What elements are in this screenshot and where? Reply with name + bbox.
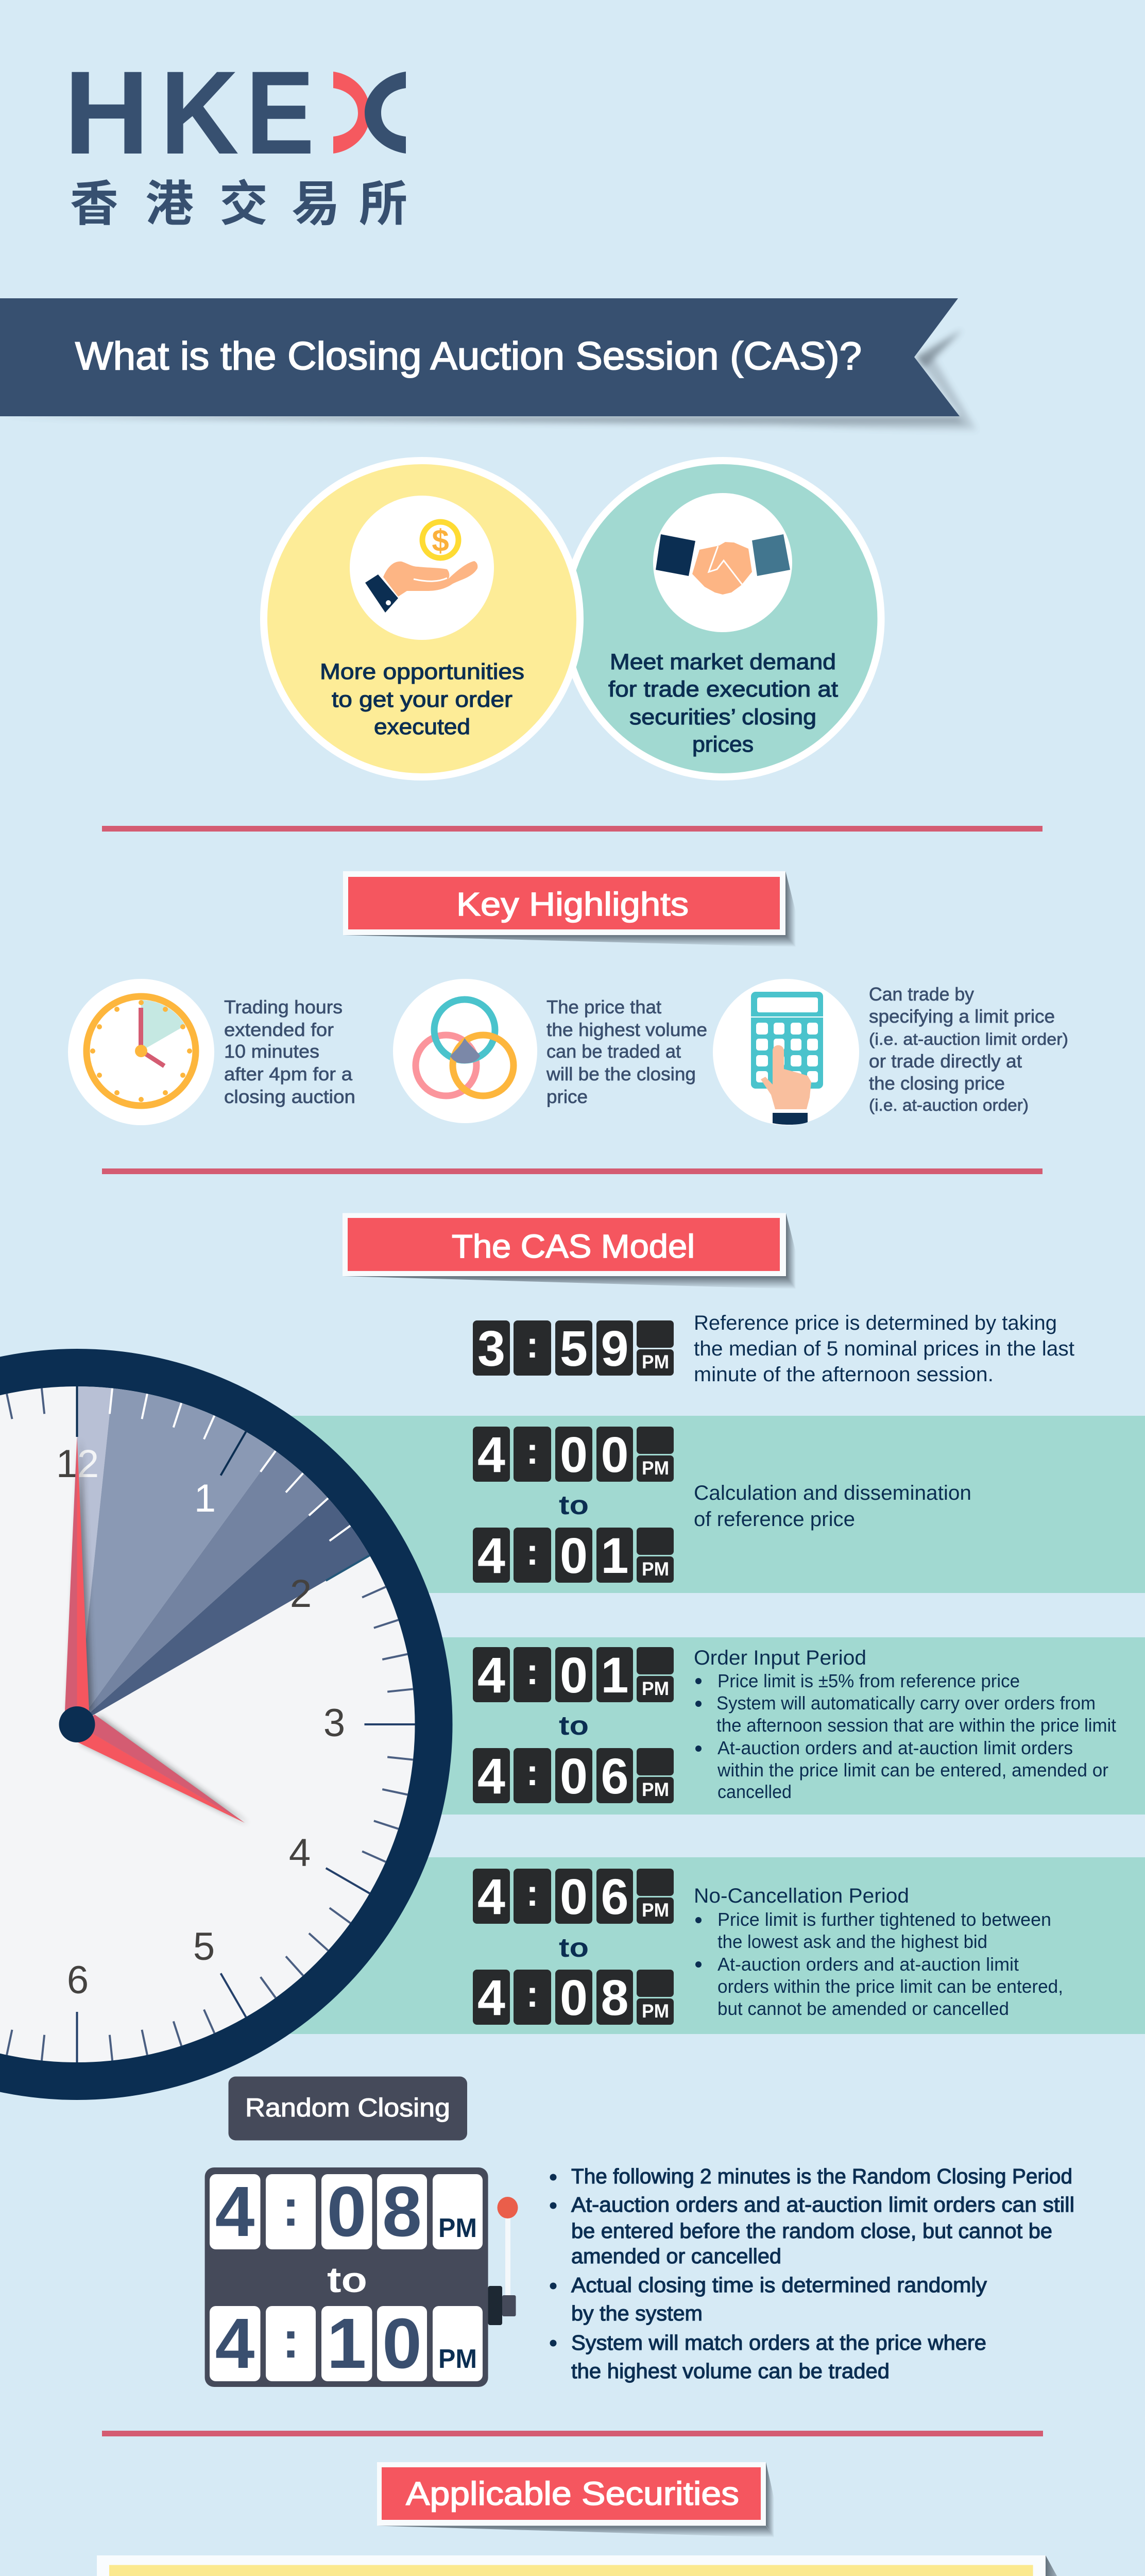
top reel: 4:08 PM: : bbox=[282, 2179, 299, 2237]
flip clock: 4:01 to 4:06 PM: PM bbox=[642, 1678, 669, 1699]
top reel: 4:08 PM: 8 bbox=[382, 2172, 422, 2251]
flip clock: 4:01 to 4:06 PM: 0 bbox=[560, 1748, 588, 1804]
text: random closing list: System will match orders at the price where bbox=[571, 2331, 986, 2354]
clock numerals: 5 bbox=[193, 1925, 215, 1969]
text: reference price: the median of 5 nominal prices in the last bbox=[694, 1337, 1074, 1360]
text: can be traded at bbox=[546, 1041, 681, 1062]
icon: handshake bbox=[656, 534, 790, 595]
flip clock: 4:00 to 4:01 PM: 4 bbox=[477, 1427, 505, 1483]
bottom reel: 4:10 PM: 1 bbox=[327, 2304, 366, 2383]
flip clock: 4:06 to 4:08 PM: PM bbox=[642, 1900, 669, 1921]
text: Trading hours bbox=[224, 996, 343, 1018]
flip clock: 4:00 to 4:01 PM: 0 bbox=[560, 1427, 588, 1483]
chart: clock face bbox=[0, 1349, 452, 2100]
logo Chinese name: 香港交易所 bbox=[70, 165, 407, 235]
clock numerals: 3 bbox=[323, 1701, 345, 1745]
text: no-cancellation period: Price limit is further tightened to between bbox=[717, 1909, 1051, 1930]
logo wordmark letters: E bbox=[246, 46, 314, 179]
flip clock: 4:01 to 4:06 PM: 6 bbox=[601, 1748, 628, 1804]
text: random closing list bbox=[550, 2164, 1074, 2383]
text: calculation and dissemination: Calculation and dissemination bbox=[694, 1482, 971, 1504]
text: random closing list: the highest volume can be traded bbox=[571, 2359, 890, 2383]
clock wedges: CAS periods bbox=[77, 1386, 370, 1724]
panel: applicable securities list bbox=[97, 2555, 1068, 2576]
text: extended for bbox=[224, 1019, 334, 1040]
text bbox=[608, 650, 838, 757]
clock ticks bbox=[7, 1386, 415, 2062]
banner ribbon bbox=[0, 298, 960, 416]
panel: trading hours highlight bbox=[68, 979, 355, 1125]
flip clock: 4:01 to 4:06 PM: : bbox=[526, 1651, 538, 1692]
clock numerals bbox=[56, 1442, 345, 2002]
text: reference price: Reference price is determined by taking bbox=[694, 1312, 1057, 1334]
text: order input period: within the price limit can be entered, amended or bbox=[717, 1759, 1108, 1781]
icon: hand with coin: $ bbox=[432, 523, 449, 558]
text: 10 minutes bbox=[224, 1041, 319, 1062]
flip clock: 4:06 to 4:08 PM: 0 bbox=[560, 1869, 588, 1925]
text: calculation and dissemination: of reference price bbox=[694, 1508, 855, 1531]
flip clock: 4:00 to 4:01 PM: to bbox=[559, 1490, 589, 1520]
heading: Random Closing bbox=[229, 2076, 467, 2140]
text: executed bbox=[374, 715, 470, 739]
text: calculation and dissemination bbox=[694, 1482, 971, 1531]
text: More opportunities bbox=[320, 659, 524, 684]
text: no-cancellation period bbox=[694, 1885, 1063, 2019]
flip clock: 4:06 to 4:08 PM: to bbox=[559, 1933, 589, 1963]
text: no-cancellation period: No-Cancellation Period bbox=[694, 1885, 909, 1907]
text: Meet market demand bbox=[610, 650, 836, 674]
bottom reel: 4:10 PM: : bbox=[282, 2311, 299, 2369]
flip clock: 4:00 to 4:01 PM: 0 bbox=[601, 1427, 628, 1483]
icon: interlocking rings bbox=[393, 979, 537, 1123]
text: no-cancellation period: but cannot be amended or cancelled bbox=[717, 1998, 1009, 2019]
circle: more opportunities bbox=[264, 461, 580, 777]
text: random closing list: by the system bbox=[571, 2301, 703, 2325]
slot machine: 4:08 to 4:10 PM bbox=[205, 2167, 518, 2387]
heading: Random Closing: Random Closing bbox=[245, 2093, 450, 2122]
text: after 4pm for a bbox=[224, 1063, 353, 1084]
panel: benefit circles bbox=[264, 461, 881, 777]
top reel: 4:08 PM: 4 bbox=[215, 2172, 255, 2251]
flip clock: 4:01 to 4:06 PM: : bbox=[526, 1752, 538, 1793]
top reel: 4:08 PM: PM bbox=[438, 2213, 477, 2243]
panel: closing price highlight bbox=[393, 979, 707, 1123]
machine body bbox=[205, 2167, 488, 2387]
text: the highest volume bbox=[546, 1019, 707, 1040]
clock hands bbox=[65, 1437, 245, 1823]
flip clock: 4:06 to 4:08 PM: 0 bbox=[560, 1970, 588, 2026]
text: no-cancellation period: the lowest ask and the highest bid bbox=[717, 1931, 987, 1952]
text: order input period: cancelled bbox=[717, 1781, 792, 1802]
text: random closing list: Actual closing time is determined randomly bbox=[571, 2273, 987, 2297]
flip clock: 4:00 to 4:01 PM: PM bbox=[642, 1458, 669, 1479]
top reel: 4:08 PM bbox=[210, 2172, 483, 2251]
flip clock: 4:01 to 4:06 PM bbox=[473, 1647, 674, 1804]
bottom reel: 4:10 PM: 4 bbox=[215, 2304, 255, 2383]
text: Can trade by bbox=[869, 984, 974, 1005]
flip clock: 4:00 to 4:01 PM: 4 bbox=[477, 1528, 505, 1584]
text: random closing list: be entered before the random close, but cannot be bbox=[571, 2219, 1052, 2243]
flip clock: 4:06 to 4:08 PM: : bbox=[526, 1974, 538, 2015]
top reel: 4:08 PM: 0 bbox=[327, 2172, 366, 2251]
text: The price that bbox=[546, 996, 661, 1018]
lever bbox=[488, 2197, 518, 2325]
logo wordmark letters: H bbox=[64, 46, 149, 179]
flip clock: 4:00 to 4:01 PM bbox=[473, 1427, 674, 1584]
clock rim and face bbox=[0, 1349, 452, 2100]
text: random closing list: At-auction orders and at-auction limit orders can still bbox=[571, 2193, 1074, 2216]
timeline bands bbox=[206, 1416, 1145, 2034]
text: specifying a limit price bbox=[869, 1006, 1055, 1027]
flip clock: 3:59 PM: PM bbox=[642, 1351, 669, 1372]
bottom reel: 4:10 PM bbox=[210, 2304, 483, 2383]
text: random closing list: The following 2 minutes is the Random Closing Period bbox=[571, 2164, 1072, 2188]
heading: Key Highlights bbox=[343, 871, 796, 947]
flip clock: 4:01 to 4:06 PM: to bbox=[559, 1711, 589, 1741]
text: reference price: minute of the afternoon session. bbox=[694, 1363, 994, 1386]
heading: Key Highlights: Key Highlights bbox=[456, 886, 689, 923]
heading: Applicable Securities bbox=[377, 2462, 774, 2537]
text: no-cancellation period: orders within the price limit can be entered, bbox=[717, 1976, 1063, 1997]
text: order input period: At-auction orders and at-auction limit orders bbox=[717, 1737, 1073, 1758]
text: order input period bbox=[694, 1647, 1116, 1802]
flip clock: 4:01 to 4:06 PM: 4 bbox=[477, 1647, 505, 1703]
text: (i.e. at-auction order) bbox=[869, 1096, 1029, 1114]
panel: order type highlight bbox=[713, 979, 1068, 1125]
text: securities’ closing bbox=[629, 705, 816, 730]
flip clock: 3:59 PM bbox=[473, 1320, 674, 1377]
text: random closing list: amended or cancelled bbox=[571, 2244, 781, 2268]
logo X mark bbox=[333, 72, 406, 154]
flip clock: 4:06 to 4:08 PM: 4 bbox=[477, 1970, 505, 2026]
flip clock: 4:06 to 4:08 PM: : bbox=[526, 1873, 538, 1914]
text: no-cancellation period: At-auction orders and at-auction limit bbox=[717, 1954, 1019, 1975]
bottom reel: 4:10 PM: 0 bbox=[382, 2304, 422, 2383]
text: closing auction bbox=[224, 1086, 355, 1107]
logo wordmark letters bbox=[64, 46, 314, 179]
bottom reel: 4:10 PM: PM bbox=[438, 2344, 477, 2374]
circle: trade execution at closing prices bbox=[565, 461, 881, 777]
text: (i.e. at-auction limit order) bbox=[869, 1030, 1068, 1048]
flip clock: 3:59 PM: 5 bbox=[560, 1320, 588, 1377]
text: reference price bbox=[694, 1312, 1074, 1386]
flip clock: 4:01 to 4:06 PM: 1 bbox=[601, 1647, 628, 1703]
flip clock: 4:06 to 4:08 PM: 8 bbox=[601, 1970, 628, 2026]
title banner bbox=[0, 298, 977, 432]
logo wordmark letters: K bbox=[160, 46, 239, 179]
heading: The CAS Model bbox=[343, 1213, 796, 1289]
icon: calculator with finger bbox=[713, 979, 859, 1125]
text: or trade directly at bbox=[869, 1050, 1022, 1072]
clock hands shadow bbox=[69, 1438, 248, 1824]
text bbox=[320, 659, 524, 739]
text bbox=[224, 996, 355, 1107]
text: will be the closing bbox=[546, 1063, 696, 1084]
clock numerals: 1 bbox=[194, 1477, 216, 1520]
flip clock: 4:06 to 4:08 PM bbox=[473, 1869, 674, 2026]
flip clock: 4:00 to 4:01 PM: : bbox=[526, 1532, 538, 1573]
title text: What is the Closing Auction Session (CAS)? bbox=[75, 334, 862, 378]
heading: The CAS Model: The CAS Model bbox=[452, 1228, 695, 1265]
text: the closing price bbox=[869, 1073, 1005, 1094]
flip clock: 4:01 to 4:06 PM: PM bbox=[642, 1779, 669, 1800]
text: price bbox=[546, 1086, 588, 1107]
text: order input period: System will automatically carry over orders from bbox=[716, 1692, 1096, 1714]
text: order input period: Order Input Period bbox=[694, 1647, 866, 1669]
flip clock: 4:06 to 4:08 PM: 4 bbox=[477, 1869, 505, 1925]
logo: HKEX bbox=[64, 46, 407, 235]
clock numerals: 6 bbox=[67, 1958, 89, 2002]
flip clock: 4:06 to 4:08 PM: PM bbox=[642, 2001, 669, 2022]
clock numerals: 2 bbox=[77, 1442, 99, 1486]
clock numerals: 4 bbox=[289, 1831, 311, 1875]
flip clock: 4:01 to 4:06 PM: 0 bbox=[560, 1647, 588, 1703]
flip clock: 3:59 PM: : bbox=[526, 1325, 538, 1366]
icon: clock bbox=[68, 979, 214, 1125]
banner shadow bbox=[0, 330, 977, 432]
flip clock: 4:00 to 4:01 PM: 0 bbox=[560, 1528, 588, 1584]
flip clock: 4:00 to 4:01 PM: 1 bbox=[601, 1528, 628, 1584]
text: order input period: the afternoon session that are within the price limit bbox=[716, 1715, 1116, 1736]
flip clock: 4:00 to 4:01 PM: PM bbox=[642, 1558, 669, 1580]
text: order input period: Price limit is ±5% from reference price bbox=[717, 1670, 1020, 1691]
flip clock: 3:59 PM: 3 bbox=[477, 1320, 505, 1377]
flip clock: 3:59 PM: 9 bbox=[601, 1320, 628, 1377]
flip clock: 4:06 to 4:08 PM: 6 bbox=[601, 1869, 628, 1925]
clock numerals: 2 bbox=[290, 1572, 312, 1616]
text: to get your order bbox=[332, 687, 512, 712]
heading: Applicable Securities: Applicable Securities bbox=[406, 2475, 739, 2512]
text bbox=[869, 984, 1068, 1114]
text: for trade execution at bbox=[608, 677, 838, 702]
icon: hand with coin bbox=[365, 522, 477, 613]
flip clock: 4:00 to 4:01 PM: : bbox=[526, 1431, 538, 1472]
clock numerals: 1 bbox=[56, 1442, 78, 1486]
text: prices bbox=[692, 732, 754, 757]
flip clock: 4:01 to 4:06 PM: 4 bbox=[477, 1748, 505, 1804]
text bbox=[546, 996, 707, 1107]
clock hub bbox=[59, 1706, 95, 1742]
to: to bbox=[327, 2260, 367, 2300]
